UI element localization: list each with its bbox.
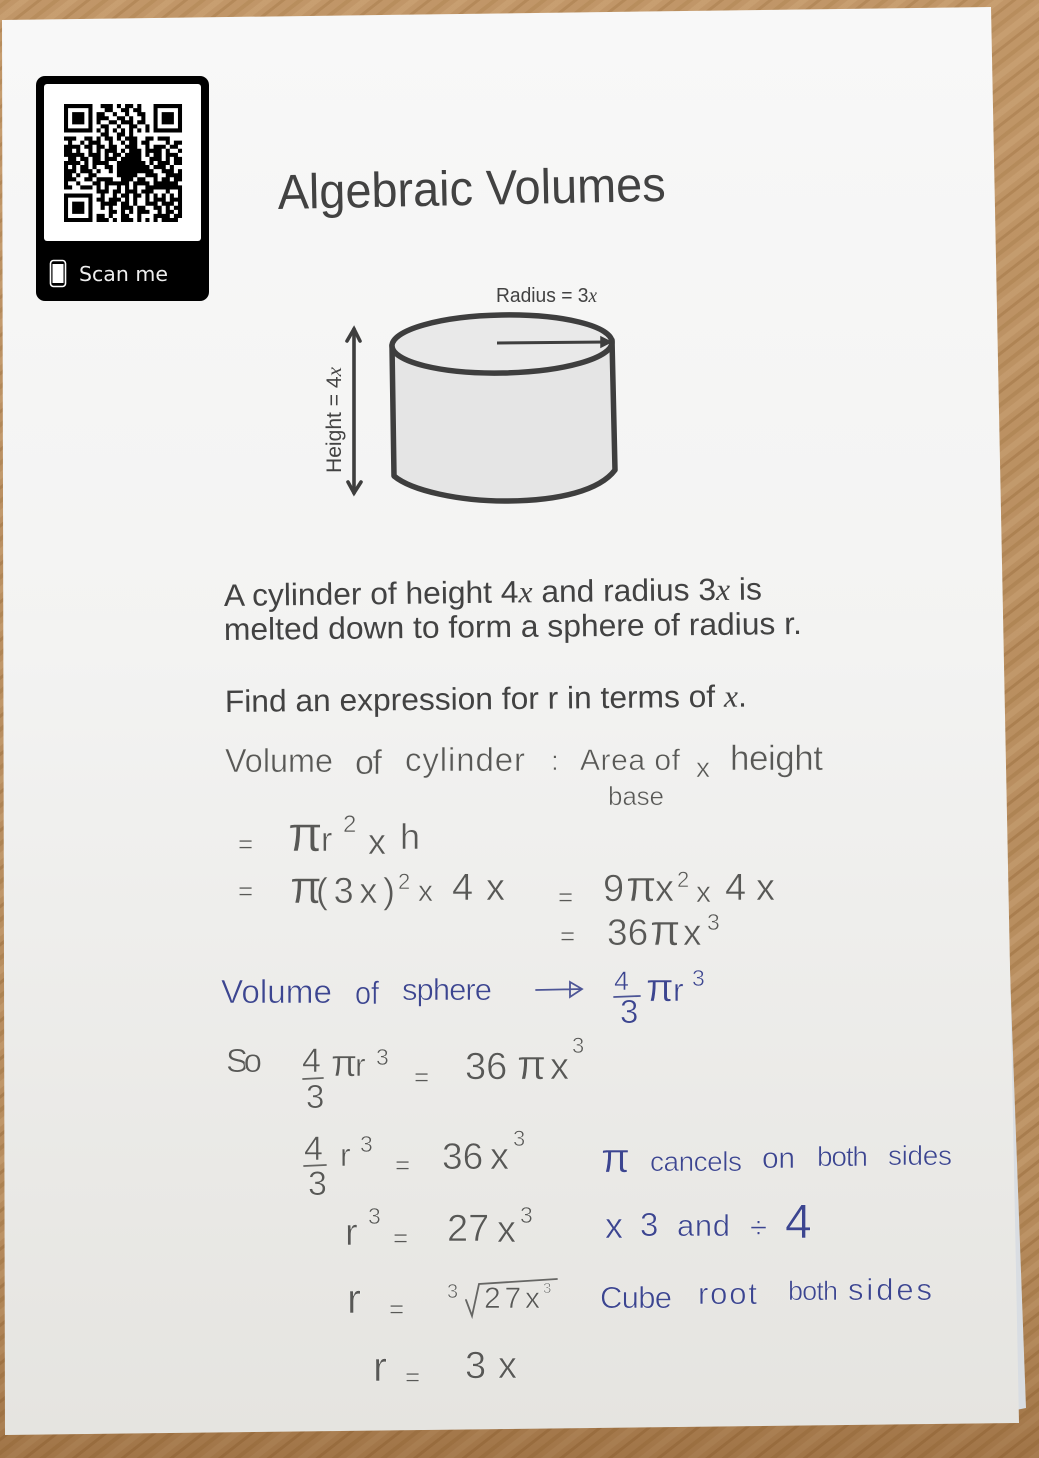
working: pi r squared times h: x: [368, 821, 386, 862]
working: volume of sphere (blue): of: [355, 975, 379, 1011]
note: cube root both sides: sides: [848, 1272, 932, 1307]
note: cube root both sides: Cube: [600, 1280, 672, 1315]
note: pi cancels on both sides: π: [601, 1134, 630, 1181]
cylinder diagram: [322, 285, 615, 501]
answer: r equals 3x: r: [373, 1343, 387, 1390]
working: cube root: [347, 1275, 557, 1324]
working: volume of cylinder heading: base: [608, 781, 664, 811]
height label: Height = 4x: [322, 366, 346, 473]
working: pi r squared times h: 2: [343, 811, 356, 838]
working: pi cancels: [304, 1126, 525, 1203]
answer: r equals 3x: 3x: [465, 1345, 517, 1387]
working: r cubed equals 27 x cubed: 3: [368, 1203, 381, 1229]
note: pi cancels on both sides: [601, 1134, 952, 1181]
note: times 3 and divide by 4: 3: [640, 1206, 658, 1243]
working: pi cancels: x: [490, 1136, 509, 1178]
note: times 3 and divide by 4: [605, 1196, 812, 1249]
working: equating volumes: =: [414, 1062, 429, 1092]
working: r cubed equals 27 x cubed: 3: [520, 1202, 533, 1228]
working: pi cancels: r: [340, 1137, 351, 1173]
icon: phone: [50, 260, 66, 286]
note: times 3 and divide by 4: and: [677, 1208, 730, 1243]
working: cube root: =: [389, 1294, 404, 1324]
QR code: [64, 106, 182, 220]
working: equating volumes: x: [550, 1046, 569, 1088]
working: substitution: 4x: [452, 867, 505, 909]
working: volume of cylinder heading: height: [730, 739, 823, 778]
working: equating volumes: [226, 1033, 584, 1115]
working: volume of sphere (blue): [221, 965, 705, 1030]
working: volume of cylinder heading: [225, 739, 823, 811]
working: substitution: x: [696, 876, 711, 909]
working: equating volumes: π: [331, 1043, 357, 1085]
working: pi r squared times h: π: [288, 806, 322, 862]
working: 36 pi x cubed: 3: [707, 909, 720, 935]
working: pi r squared times h: [238, 806, 420, 862]
note: cube root both sides: root: [698, 1276, 757, 1311]
working: 36 pi x cubed: [560, 906, 720, 955]
working: equating volumes: r: [355, 1047, 366, 1083]
working: substitution: (3x): [316, 870, 395, 911]
working: volume of sphere (blue): r: [673, 972, 684, 1008]
working: pi r squared times h: h: [400, 816, 420, 857]
working: equating volumes: 3: [376, 1044, 389, 1070]
working: 36 pi x cubed: 36: [607, 912, 648, 953]
working: equating volumes: 4: [302, 1042, 321, 1080]
working: pi cancels: 4: [304, 1130, 323, 1168]
working: cube root: 3: [543, 1280, 551, 1297]
note: times 3 and divide by 4: ÷: [750, 1210, 767, 1245]
question text: Find an expression for r in terms of x.: [225, 679, 747, 719]
working: equating volumes: π: [517, 1041, 546, 1088]
working: substitution: =: [238, 876, 253, 906]
working: r cubed equals 27 x cubed: x: [497, 1209, 516, 1251]
note: pi cancels on both sides: sides: [888, 1140, 952, 1171]
working: volume of sphere (blue): 4: [614, 966, 629, 996]
working: r cubed equals 27 x cubed: =: [393, 1223, 408, 1253]
working: r cubed equals 27 x cubed: [345, 1202, 533, 1254]
working: substitution: 4x: [725, 867, 775, 909]
working: equating volumes: 36: [465, 1046, 507, 1088]
working: pi cancels: 3: [308, 1165, 327, 1203]
note: times 3 and divide by 4: 4: [785, 1196, 812, 1249]
working: cube root: 3: [447, 1281, 458, 1303]
scan me label: Scan me: [79, 262, 168, 286]
note: pi cancels on both sides: cancels: [650, 1146, 742, 1177]
height arrow: [347, 329, 361, 493]
working: cube root: r: [347, 1275, 361, 1322]
working: r cubed equals 27 x cubed: 27: [447, 1208, 489, 1250]
working: volume of sphere (blue): sphere: [402, 972, 492, 1007]
working: volume of sphere (blue): 3: [692, 965, 705, 991]
working: equating volumes: 3: [572, 1033, 584, 1058]
working: substitution: =: [558, 882, 573, 912]
working: volume of cylinder heading: x: [696, 752, 710, 783]
QR code card: [36, 76, 209, 301]
cylinder: [392, 313, 615, 501]
working: pi cancels: 3: [360, 1131, 373, 1157]
working: volume of cylinder heading: Area of: [580, 744, 681, 777]
note: cube root both sides: both: [788, 1276, 838, 1306]
working: substitution: [238, 861, 775, 913]
working: volume of sphere (blue): Volume: [221, 973, 332, 1010]
radius label: Radius = 3x: [496, 285, 597, 307]
working: r cubed equals 27 x cubed: r: [345, 1212, 358, 1254]
working: pi cancels: 36: [442, 1136, 483, 1177]
working: substitution: x: [418, 875, 433, 908]
working: volume of cylinder heading: :: [551, 745, 559, 776]
answer: r equals 3x: =: [405, 1362, 420, 1392]
answer: r equals 3x: [373, 1343, 517, 1392]
working: substitution: π: [290, 861, 322, 913]
working: pi r squared times h: r: [321, 821, 332, 859]
working: volume of cylinder heading: Volume: [225, 742, 333, 779]
working: equating volumes: So: [226, 1042, 262, 1079]
working: cube root: 27x: [484, 1282, 540, 1315]
question text: [224, 571, 802, 719]
working: pi r squared times h: =: [238, 829, 253, 859]
working: substitution: 9: [603, 868, 624, 910]
working: substitution: 2: [398, 869, 410, 894]
working: 36 pi x cubed: π: [650, 906, 680, 955]
working: pi cancels: 3: [513, 1126, 525, 1151]
working: 36 pi x cubed: =: [560, 921, 575, 951]
working: substitution: 2: [677, 867, 689, 892]
working: substitution: π: [626, 862, 656, 911]
radius arrow: [497, 337, 611, 347]
working: 36 pi x cubed: x: [683, 912, 702, 953]
question text: melted down to form a sphere of radius r.: [224, 606, 802, 647]
note: cube root both sides: [600, 1272, 932, 1315]
working: pi cancels: =: [395, 1150, 410, 1180]
working: volume of sphere (blue): 3: [620, 993, 638, 1030]
note: pi cancels on both sides: both: [817, 1141, 868, 1172]
title: Algebraic Volumes: [277, 158, 666, 220]
second sheet edge: [1000, 700, 1026, 1410]
working: volume of cylinder heading: cylinder: [405, 741, 525, 778]
arrow: [536, 982, 582, 997]
question text: A cylinder of height 4x and radius 3x is: [224, 571, 762, 613]
note: times 3 and divide by 4: x: [605, 1205, 623, 1246]
working: volume of sphere (blue): π: [646, 966, 674, 1010]
working: equating volumes: 3: [306, 1078, 324, 1115]
working: substitution: x: [655, 868, 674, 910]
working: volume of cylinder heading: of: [355, 744, 383, 782]
note: pi cancels on both sides: on: [762, 1142, 795, 1175]
